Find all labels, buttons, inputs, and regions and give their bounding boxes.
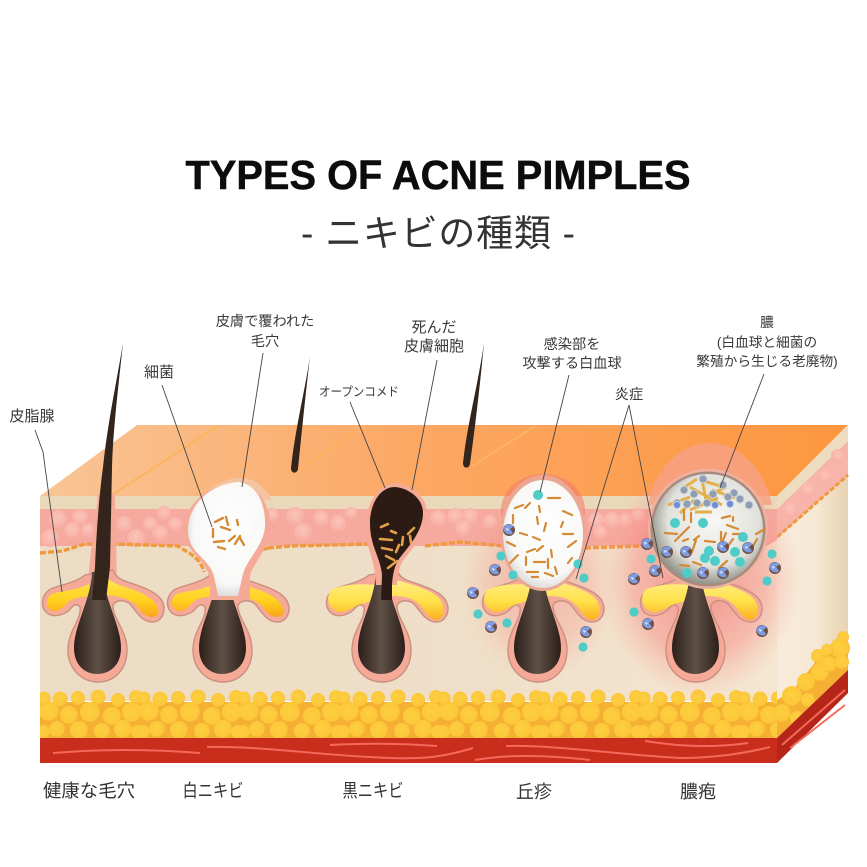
label: attacking white blood cells: 攻撃する白血球	[522, 356, 622, 372]
leader: inflammation	[576, 405, 663, 579]
caption: blackhead: 黒ニキビ	[342, 781, 404, 801]
label: inflammation: 炎症	[615, 387, 643, 403]
label: pus: (白血球と細菌の	[717, 335, 817, 350]
bacteria	[213, 517, 244, 549]
bacteria	[665, 510, 765, 568]
bacteria	[507, 498, 576, 577]
label: dead skin cells: 皮膚細胞	[404, 338, 464, 355]
fat layer	[36, 631, 850, 739]
bacteria	[380, 524, 414, 568]
skin dome	[196, 478, 272, 505]
muscle layer	[40, 670, 848, 763]
yellow waste	[668, 479, 735, 513]
caption: whitehead: 白ニキビ	[182, 781, 244, 801]
label: covered pore: 皮膚で覆われた	[216, 313, 314, 330]
label: covered pore: 毛穴	[251, 334, 279, 350]
leader: sebaceous gland	[35, 430, 62, 592]
white comedo	[188, 482, 265, 596]
label: sebaceous gland: 皮脂腺	[9, 408, 55, 425]
skin creases	[112, 426, 535, 495]
beige surface strip	[40, 496, 777, 509]
pink lining	[366, 483, 427, 585]
right side beige edge	[777, 426, 848, 509]
label: pus: 繁殖から生じる老廃物)	[696, 353, 838, 369]
right side pink layer	[760, 441, 848, 547]
raised dome	[648, 443, 772, 505]
label: pus: 膿	[760, 315, 774, 330]
follicle: whitehead	[167, 478, 289, 682]
label: dead skin cells: 死んだ	[411, 319, 457, 336]
white blood cells	[661, 541, 754, 579]
hair 3	[463, 343, 484, 468]
cells outside the papule	[467, 551, 592, 652]
lining	[500, 475, 586, 591]
pus cells	[673, 475, 753, 509]
pink lining	[184, 484, 270, 600]
leader: dead skin cells	[412, 360, 437, 490]
caption: papule: 丘疹	[516, 782, 552, 802]
cells outside the pustule	[628, 538, 781, 637]
fibre line	[40, 542, 640, 578]
epidermis cells	[41, 449, 845, 547]
front face dermis	[40, 496, 777, 701]
cyan cell	[533, 490, 543, 500]
right side fibre line	[767, 475, 848, 546]
caption: pustule: 膿疱	[680, 782, 716, 802]
leader: open comedo	[350, 402, 385, 488]
leader: bacteria	[162, 385, 212, 527]
follicle: blackhead	[326, 483, 448, 682]
inflammation glow: papule	[462, 490, 618, 680]
white sac	[503, 480, 583, 588]
white blood cell	[503, 524, 515, 536]
pink sheath	[88, 494, 117, 585]
leader: pus	[720, 374, 764, 488]
panel: skin block	[36, 425, 850, 763]
hair 1	[92, 343, 123, 600]
follicle: pustule	[640, 443, 772, 682]
pus sac	[653, 474, 763, 584]
black comedo	[370, 487, 423, 600]
label: bacteria: 細菌	[144, 364, 174, 381]
leader: covered pore	[242, 353, 263, 487]
title: TYPES OF ACNE PIMPLES	[186, 152, 690, 198]
follicle: healthy pore	[42, 343, 164, 682]
label: attacking white blood cells: 感染部を	[544, 336, 600, 353]
leader: white blood cells	[540, 375, 569, 492]
pink epidermis layer	[40, 509, 777, 546]
subtitle: - ニキビの種類 -	[301, 213, 575, 254]
inflammation glow: pustule	[600, 462, 800, 698]
hair 2	[291, 357, 310, 473]
follicle: papule	[482, 474, 604, 682]
skin top surface	[40, 425, 848, 496]
right side face	[777, 426, 848, 763]
rim shadow	[650, 472, 766, 586]
red halo	[501, 474, 585, 546]
label: open comedo: オープンコメド	[319, 385, 399, 399]
cyan cells	[670, 518, 748, 578]
pink rim	[648, 469, 768, 589]
caption: healthy pore: 健康な毛穴	[43, 781, 135, 801]
